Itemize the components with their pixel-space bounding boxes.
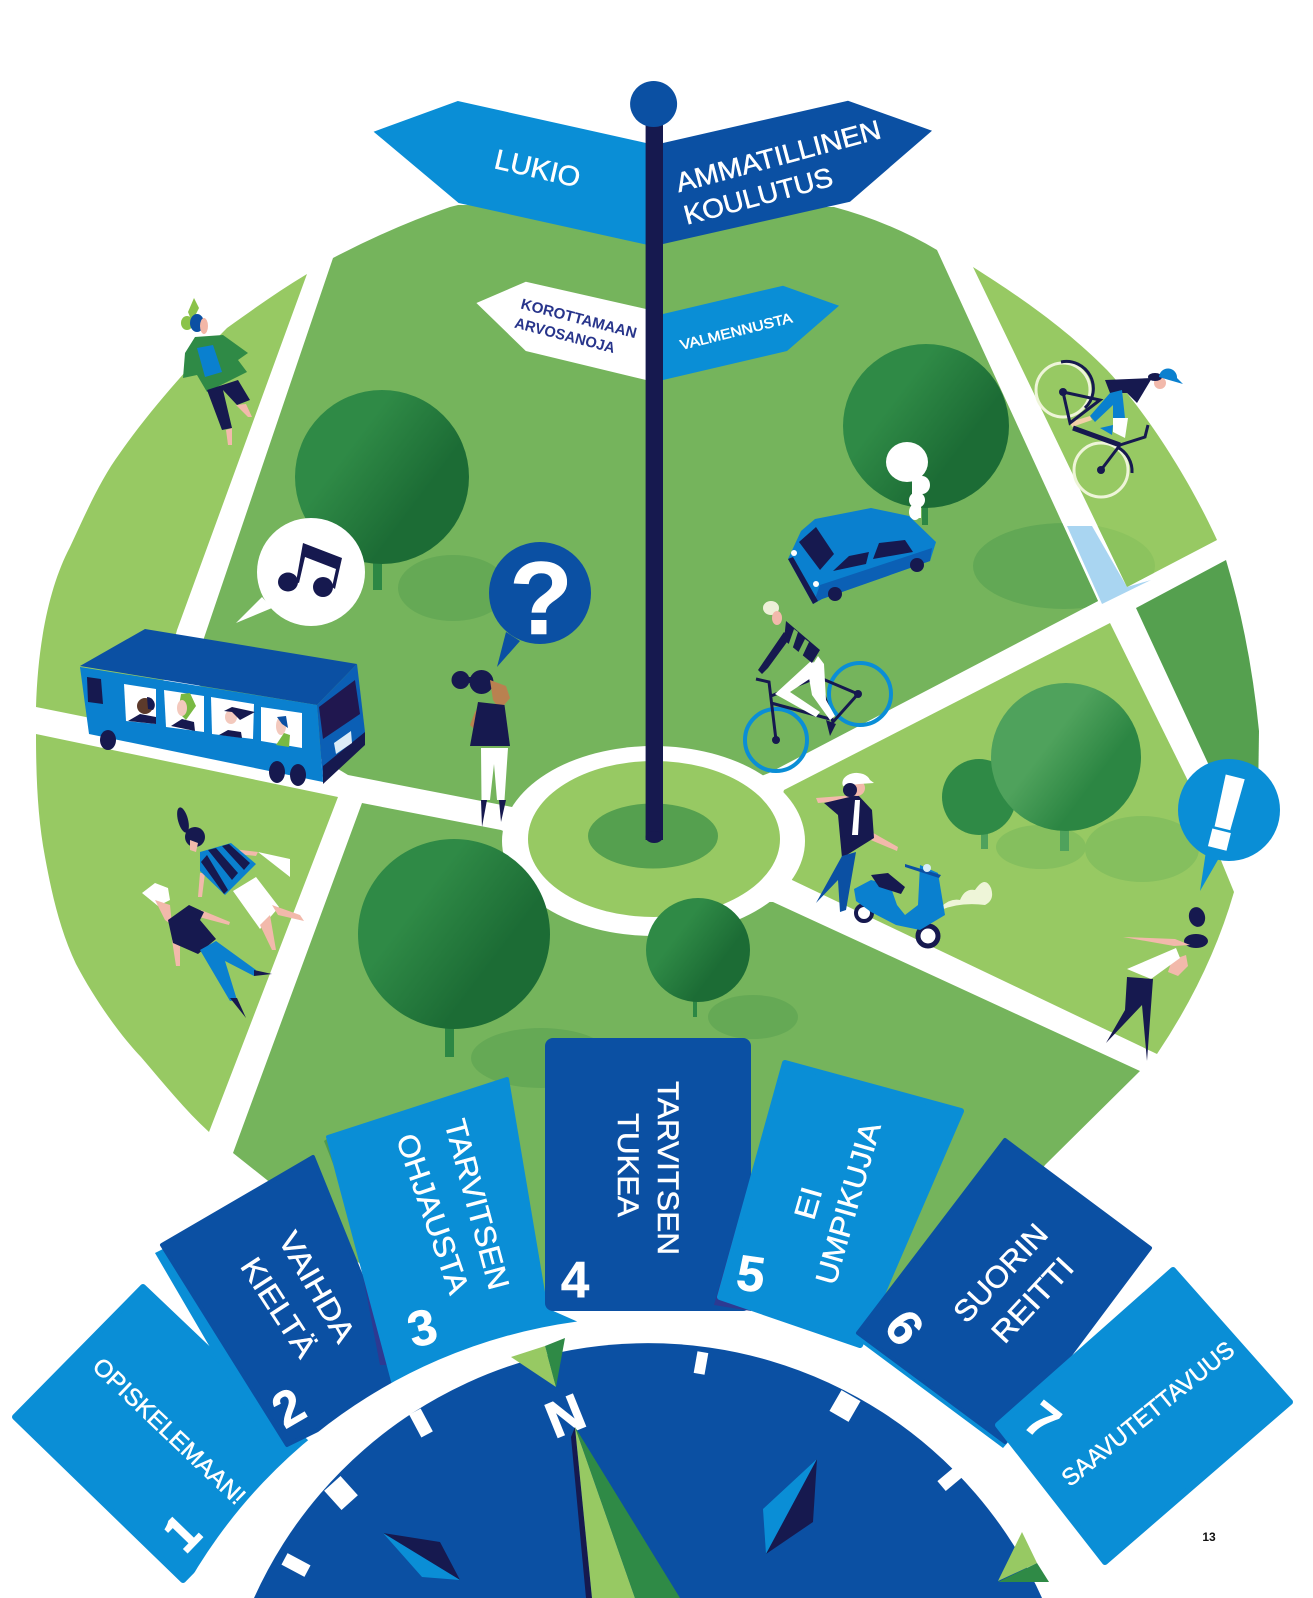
card 3: Tarvitsen ohjausta: 3 [402,1297,443,1359]
card 3: Tarvitsen ohjausta [324,1079,580,1400]
signpost: lower sign Korottamaan arvosanoja [476,282,646,380]
compass diamond right [763,1459,817,1554]
card 5: Ei umpikujia: EI [789,1183,829,1223]
signpost: lower sign Valmennusta: VALMENNUSTA [678,309,795,353]
tree: upper right [843,344,1009,525]
compass tick marks [281,1351,963,1577]
bus windows with passengers [124,684,302,748]
card 4: Tarvitsen tukea: TUKEA [611,1113,644,1217]
card 6: Suorin reitti: REITTI [986,1251,1081,1350]
card 4: Tarvitsen tukea: TARVITSEN [651,1081,684,1255]
person: woman pointing [1106,905,1208,1061]
card 7: Saavutettavuus: SAAVUTETTAVUUS [1057,1336,1240,1492]
exhaust cloud [886,442,930,520]
card 5: Ei umpikujia [720,1063,961,1345]
segment: lower-left wedge [36,734,338,1132]
tree: small centre [646,898,750,1017]
person: woman with question [452,670,510,827]
signpost: lower sign Valmennusta [663,286,839,380]
speech bubble: exclamation: ! [1197,755,1256,871]
card 2: Vaihda kieltä: KIELTÄ [234,1252,322,1364]
pointer bottom right [998,1532,1049,1582]
signpost: upper sign Ammatillinen koulutus [663,101,932,244]
pale blue road patch [1067,526,1151,604]
card 7: Saavutettavuus: 7 [1014,1390,1071,1451]
speech bubble: exclamation [1178,755,1280,891]
card 6: Suorin reitti: SUORIN [947,1218,1055,1329]
signpost: lower sign Korottamaan arvosanoja: ARVOSANOJA [513,315,617,357]
card 1: Opiskelemaan: 1 [144,1495,216,1567]
card 3: Tarvitsen ohjausta: OHJAUSTA [389,1130,475,1298]
segment: central upper park [190,205,1098,820]
card 1: Opiskelemaan: OPISKELEMAAN! [87,1353,250,1510]
tree: right small [942,759,1016,849]
segment: upper-left wedge [36,274,307,730]
figure: navy shirt [142,883,272,1018]
car with exhaust cloud [788,442,936,604]
signpost pole [630,81,677,843]
north pointer top [511,1338,565,1387]
compass diamond left [383,1533,460,1580]
card 2: Vaihda kieltä: 2 [262,1377,315,1439]
central roundabout [502,746,805,936]
cyclist: lower [745,601,891,771]
bus [80,629,365,786]
segment: right dark wedge [1136,560,1259,800]
card 7: Saavutettavuus [998,1270,1290,1562]
map of green park segments [36,205,1259,1300]
cards fan [15,1038,1290,1580]
segment: central lower park [233,803,1140,1300]
compass [180,1317,1116,1598]
segment: right mid wedge [770,623,1234,1054]
north letter: N [538,1383,593,1449]
icon: music note [278,543,342,597]
exhaust puff [941,882,992,910]
card 4: Tarvitsen tukea: 4 [561,1251,590,1308]
compass needle [571,1427,680,1598]
signpost: upper sign Lukio [374,101,648,245]
card 2: Vaihda kieltä [155,1157,420,1450]
speech bubble: question: ? [509,541,573,657]
tree: upper left [295,390,469,590]
page number: 13 [1202,1530,1216,1544]
person: standing by the scooter [816,773,898,912]
people: two figures on the lawn [142,806,304,1018]
signpost: upper sign Ammatillinen koulutus: KOULUTUS [680,162,836,231]
card 1: Opiskelemaan [15,1287,312,1580]
tree: right big [991,683,1141,851]
card 2: Vaihda kieltä: VAIHDA [271,1226,361,1348]
signpost: lower sign Korottamaan arvosanoja: KOROTTAMAAN [519,296,638,342]
signpost: upper sign Lukio: LUKIO [492,144,583,193]
card 4: Tarvitsen tukea [545,1038,751,1311]
ground shadows under trees [398,523,1199,1088]
speech bubble: music [236,518,365,626]
person: green jacket with backpack [181,298,252,445]
card 6: Suorin reitti [855,1140,1150,1448]
card 5: Ei umpikujia: 5 [733,1244,769,1304]
card 3: Tarvitsen ohjausta: TARVITSEN [438,1116,515,1293]
card 5: Ei umpikujia: UMPIKUJIA [810,1119,888,1288]
figure: striped shirt [175,806,304,950]
signpost: upper sign Ammatillinen koulutus: AMMATILLINEN [672,115,884,198]
segment: upper-right wedge [973,267,1217,587]
scooter with exhaust [854,864,992,946]
cyclist: top right [1036,361,1183,497]
speech bubble: question [489,541,591,667]
tree: large bottom left [358,839,550,1057]
card 6: Suorin reitti: 6 [874,1299,935,1356]
